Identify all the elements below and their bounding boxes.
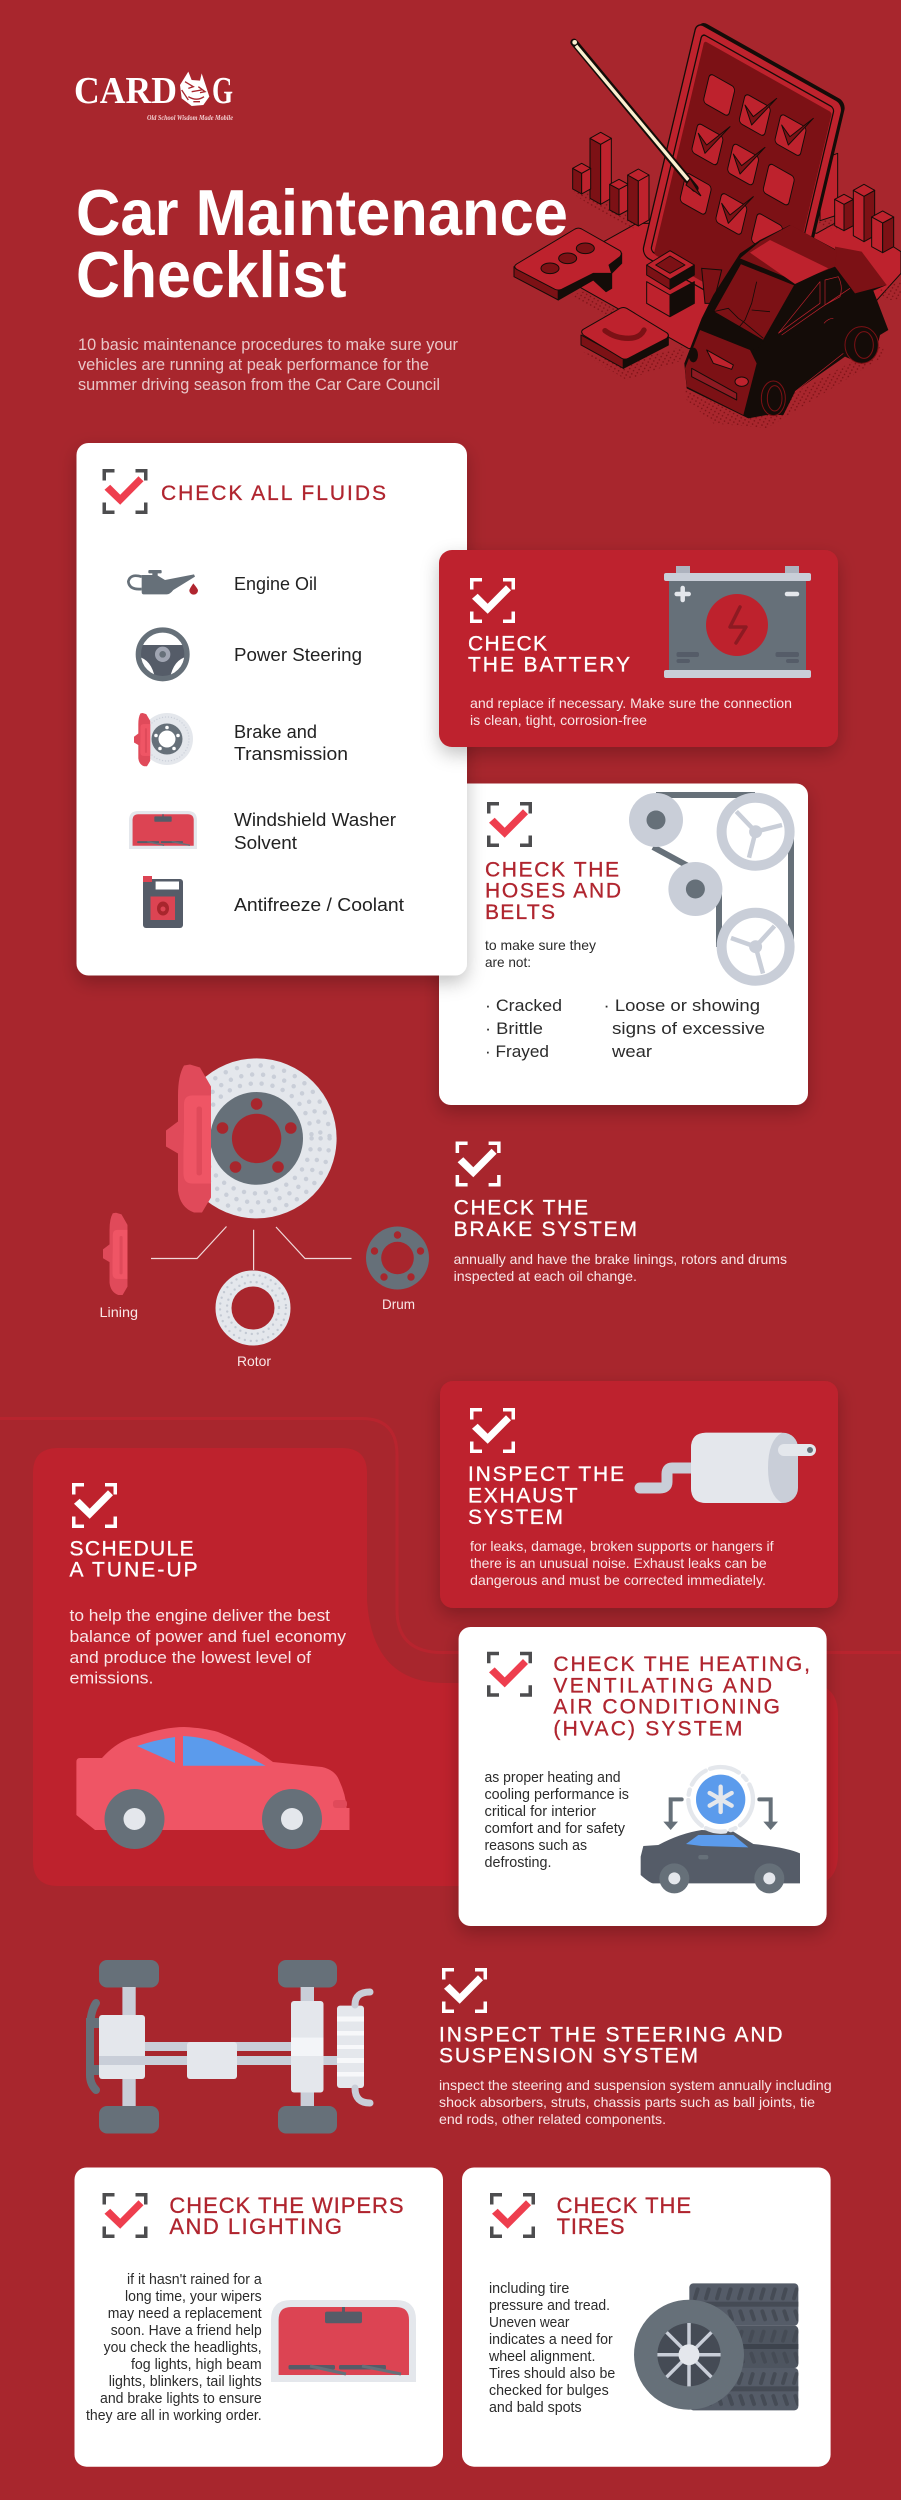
panel: check the hoses and belts (439, 784, 808, 1105)
heading (70, 1538, 198, 1582)
intro paragraph: summer driving season from the Car Care Council (78, 375, 440, 394)
body text: if it hasn't rained for a (127, 2272, 263, 2288)
icon: steering wheel (138, 630, 187, 679)
logo tagline: Old School Wisdom Made Mobile (147, 113, 234, 122)
pencil (572, 40, 701, 196)
logo: CARDOG (74, 70, 234, 122)
tablet with checklist cells (642, 19, 846, 338)
heading (557, 2193, 691, 2239)
check icon (487, 1652, 532, 1697)
body text: they are all in working order. (86, 2408, 262, 2424)
panel: inspect the exhaust system (440, 1381, 838, 1608)
heading: SCHEDULE (70, 1538, 194, 1560)
body text: emissions. (70, 1668, 154, 1688)
icon: windshield (129, 811, 197, 849)
body text: and replace if necessary. Make sure the connection (470, 695, 792, 711)
label: drum: Drum (382, 1296, 415, 1312)
heading: CHECK ALL FLUIDS (161, 482, 386, 505)
logo wordmark left: CARD (74, 70, 177, 112)
item text: engine oil: Engine Oil (234, 573, 317, 594)
heading: TIRES (557, 2214, 625, 2239)
body text (470, 695, 792, 728)
list of conditions: signs of excessive (612, 1019, 765, 1038)
label: rotor: Rotor (237, 1353, 271, 1369)
check icon (72, 1483, 117, 1528)
heading: A TUNE-UP (70, 1558, 198, 1582)
floor platform (551, 217, 901, 350)
body text: balance of power and fuel economy (70, 1627, 347, 1646)
title: Checklist (76, 239, 346, 311)
check icon (442, 1968, 487, 2013)
heading: (HVAC) SYSTEM (553, 1718, 742, 1740)
body text: cooling performance is (484, 1787, 629, 1803)
list of conditions (485, 996, 765, 1061)
item text: windshield washer solvent (234, 809, 396, 853)
check icon (102, 469, 148, 514)
heading: BRAKE SYSTEM (454, 1218, 637, 1241)
icon: battery (664, 566, 811, 678)
body text: lights, blinkers, tail lights (109, 2374, 262, 2390)
heading (169, 2193, 404, 2239)
body text (470, 1538, 774, 1588)
body text: is clean, tight, corrosion-free (470, 712, 647, 728)
small dark block behind car (702, 268, 722, 303)
section: inspect the steering and suspension system (439, 1968, 832, 2127)
body text (439, 2077, 832, 2127)
body text: wheel alignment. (488, 2349, 595, 2365)
heading: CHECK THE (557, 2193, 691, 2218)
body text: comfort and for safety (484, 1821, 626, 1837)
body text: indicates a need for (489, 2332, 613, 2348)
intro text (485, 937, 596, 970)
body text: defrosting. (484, 1855, 552, 1871)
body text: inspected at each oil change. (454, 1268, 637, 1284)
heading (468, 1463, 624, 1529)
heading: CHECK THE (454, 1196, 588, 1220)
item text: brake and transmission: Transmission (234, 743, 348, 764)
hero illustration: tablet checklist, pencil and car (514, 19, 901, 428)
body text: shock absorbers, struts, chassis parts such as ball joints, tie (439, 2094, 815, 2110)
heading: AIR CONDITIONING (553, 1696, 780, 1718)
body text: long time, your wipers (125, 2289, 262, 2305)
body text (86, 2272, 263, 2424)
heading (454, 1196, 637, 1241)
steering and suspension illustration (86, 1960, 370, 2134)
connector lines (151, 1226, 352, 1270)
part: rotor (220, 1275, 286, 1341)
label: lining: Lining (100, 1304, 138, 1320)
item text: brake and transmission (234, 721, 348, 764)
body text (454, 1251, 787, 1284)
heading: THE BATTERY (468, 654, 630, 676)
heading (439, 2024, 783, 2068)
icon: oil can (128, 570, 198, 595)
body text (70, 1606, 347, 1688)
body text (488, 2281, 615, 2416)
red car illustration (76, 1727, 350, 1849)
heading: BELTS (485, 901, 555, 924)
body text: critical for interior (484, 1804, 596, 1820)
heading: CHECK THE WIPERS (169, 2193, 404, 2218)
brake disc with caliper (166, 1058, 337, 1218)
part: lining (103, 1213, 127, 1295)
item text: windshield washer solvent: Solvent (234, 832, 297, 853)
body text: reasons such as (484, 1838, 587, 1854)
item text: power steering: Power Steering (234, 644, 362, 665)
body text: end rods, other related components. (439, 2111, 666, 2127)
heading (485, 858, 621, 924)
body text: Tires should also be (489, 2366, 615, 2382)
logo wordmark G: G (212, 70, 233, 112)
check icon (490, 2193, 535, 2238)
panel: check the HVAC system (459, 1627, 827, 1926)
heading: CHECK THE (485, 858, 619, 882)
intro text: are not: (485, 954, 531, 970)
brake system illustration (100, 1058, 429, 1369)
item text: brake and transmission: Brake and (234, 721, 317, 742)
heading: HOSES AND (485, 880, 621, 902)
check icon (470, 578, 515, 623)
item text: antifreeze: Antifreeze / Coolant (234, 894, 404, 915)
icon: brake disc (134, 713, 193, 766)
heading: INSPECT THE STEERING AND (439, 2024, 783, 2046)
body text: pressure and tread. (489, 2298, 610, 2314)
part: drum (366, 1226, 429, 1290)
body text (484, 1770, 629, 1871)
body text: and produce the lowest level of (70, 1648, 311, 1667)
heading: INSPECT THE (468, 1463, 624, 1486)
isometric car (684, 225, 888, 418)
check icon (470, 1408, 515, 1453)
body text: including tire (489, 2281, 569, 2297)
body text: Uneven wear (489, 2315, 570, 2331)
intro paragraph: vehicles are running at peak performance for the (78, 355, 429, 374)
title (76, 177, 568, 311)
heading: VENTILATING AND (553, 1674, 772, 1698)
body text: you check the headlights, (104, 2340, 262, 2356)
body text: checked for bulges (489, 2383, 609, 2399)
section: check the brake system (454, 1142, 787, 1284)
panel: schedule a tune-up (33, 1448, 838, 1886)
body text: annually and have the brake linings, rotors and drums (454, 1251, 787, 1267)
list of conditions: wear (611, 1042, 652, 1061)
heading: CHECK (468, 632, 547, 656)
heading (553, 1653, 810, 1740)
heading: CHECK THE HEATING, (553, 1653, 810, 1676)
title: Car Maintenance (76, 177, 568, 249)
heading: EXHAUST (468, 1484, 578, 1508)
body text: for leaks, damage, broken supports or hangers if (470, 1538, 774, 1554)
list of conditions: · Loose or showing (604, 996, 760, 1015)
body text: soon. Have a friend help (111, 2323, 262, 2339)
body text: fog lights, high beam (131, 2357, 262, 2373)
intro text: to make sure they (485, 937, 596, 953)
belts and pulleys illustration (629, 793, 791, 981)
icon: windshield and wipers (271, 2300, 416, 2382)
panel: check the tires (462, 2168, 831, 2467)
logo dog head (180, 72, 209, 106)
intro paragraph (78, 335, 458, 394)
check icon (102, 2193, 148, 2238)
body text: may need a replacement (108, 2306, 262, 2322)
HVAC car and snowflake illustration (641, 1767, 800, 1893)
icon: coolant jug (143, 876, 183, 928)
body text: dangerous and must be corrected immediately. (470, 1572, 766, 1588)
phone block (581, 307, 668, 368)
panel: check all fluids (76, 443, 467, 976)
stacked box block (647, 251, 694, 317)
halftone shadow dots (570, 192, 901, 428)
list of conditions: · Brittle (485, 1019, 543, 1038)
heading: SUSPENSION SYSTEM (439, 2044, 698, 2068)
body text: and brake lights to ensure (100, 2391, 262, 2407)
check icon (456, 1142, 501, 1186)
body text: there is an unusual noise. Exhaust leaks can be (470, 1555, 767, 1571)
body text: and bald spots (489, 2400, 582, 2416)
check icon (487, 802, 532, 847)
chat bubble block (514, 228, 622, 300)
muffler illustration (640, 1433, 816, 1503)
list of conditions: · Frayed (485, 1042, 549, 1061)
heading: SYSTEM (468, 1506, 563, 1529)
icon: tire stack (634, 2283, 798, 2410)
body text: inspect the steering and suspension system annually including (439, 2077, 832, 2093)
list of conditions: · Cracked (485, 996, 562, 1015)
item text: windshield washer solvent: Windshield Washer (234, 809, 396, 830)
heading: AND LIGHTING (169, 2214, 342, 2239)
panel: check the wipers and lighting (74, 2168, 443, 2467)
heading (468, 632, 630, 676)
panel: check the battery (439, 550, 838, 747)
bar columns left and right (573, 132, 894, 253)
intro paragraph: 10 basic maintenance procedures to make sure your (78, 335, 458, 354)
body text: to help the engine deliver the best (70, 1606, 330, 1625)
body text: as proper heating and (484, 1770, 620, 1786)
